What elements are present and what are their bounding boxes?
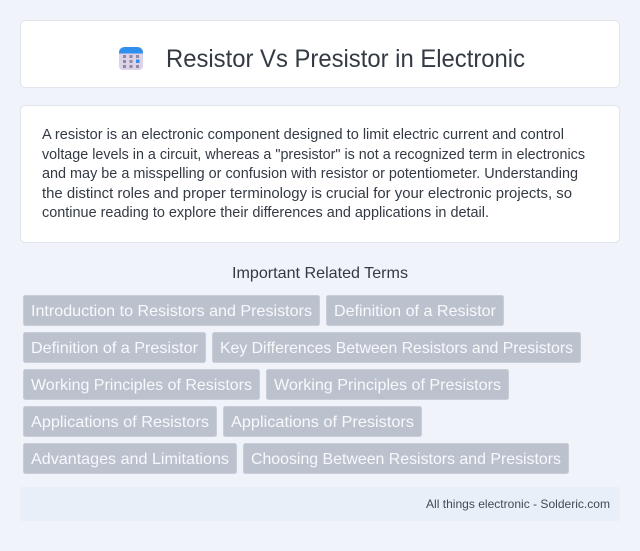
panel: intro paragraph: and may be a misspelling or confusion with resistor or potentiometer. Understanding: [42, 166, 578, 182]
title: Resistor Vs Presistor in Electronic: [166, 45, 525, 73]
panel: intro paragraph: [20, 106, 620, 242]
chips: related terms: Key Differences Between Resistors and Presistors: [220, 340, 573, 357]
chips: related terms: Definition of a Presistor: [31, 340, 199, 357]
footer: All things electronic - Solderic.com: [426, 497, 610, 511]
panel: intro paragraph: the distinct roles and proper terminology is crucial for your electronic projects, so: [42, 186, 572, 202]
chips: related terms: Applications of Presistors: [231, 414, 414, 431]
chips: related terms: Working Principles of Presistors: [274, 377, 501, 394]
panel: intro paragraph: continue reading to explore their differences and applications in detail.: [42, 205, 489, 221]
footer: [20, 487, 620, 521]
chips: related terms: Applications of Resistors: [31, 414, 209, 431]
icon: calendar: [119, 47, 143, 70]
chips: related terms: Advantages and Limitations: [31, 451, 229, 468]
panel: intro paragraph: voltage levels in a circuit, whereas a "presistor" is not a recognized term in electronics: [42, 147, 585, 163]
panel: intro paragraph: A resistor is an electronic component designed to limit electric current and control: [42, 127, 564, 143]
chips: related terms: Choosing Between Resistors and Presistors: [251, 451, 561, 468]
chips: related terms: Definition of a Resistor: [334, 303, 497, 320]
chips: related terms: Working Principles of Resistors: [31, 377, 252, 394]
panel: header: [20, 20, 620, 88]
chips: related terms: [24, 296, 580, 474]
heading: related terms: Important Related Terms: [232, 265, 408, 282]
chips: related terms: Introduction to Resistors and Presistors: [31, 303, 312, 320]
